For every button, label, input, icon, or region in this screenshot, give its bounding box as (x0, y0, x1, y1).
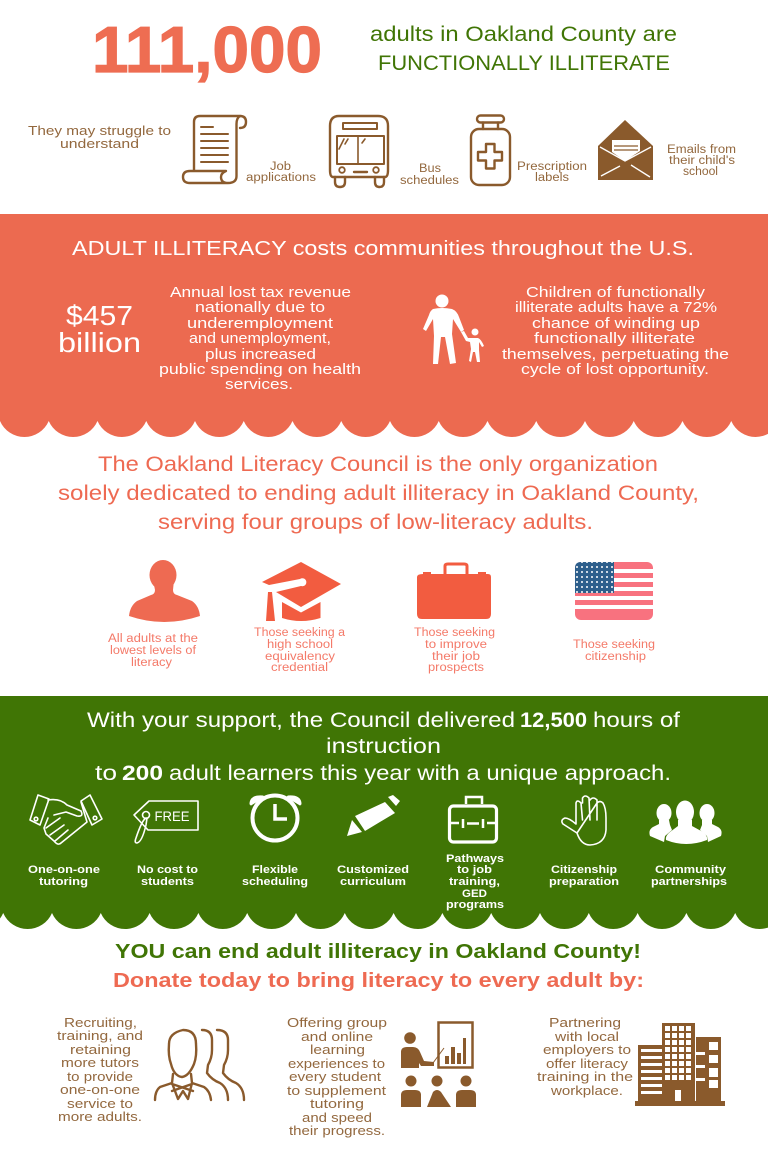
label: pathways: GED (462, 888, 487, 900)
label: bus schedules: schedules (400, 175, 459, 187)
label: flexible scheduling: Flexible (252, 864, 298, 876)
label: high school equivalency: Those seeking a (254, 627, 346, 639)
band statement (87, 709, 680, 785)
text: children of illiterate adults: chance of winding up (532, 315, 700, 332)
label: customized curriculum: Customized (337, 864, 409, 876)
band statement: With your support, the Council delivered (87, 709, 515, 732)
icon: bus (330, 116, 388, 187)
text: group and online learning: tutoring (310, 1096, 364, 1111)
text: children of illiterate adults (502, 284, 729, 378)
icon: prescription bottle (471, 116, 510, 185)
label: pathways: training, (449, 876, 500, 888)
text: group and online learning: their progress. (289, 1123, 385, 1138)
labels: approach features (28, 853, 727, 911)
label: emails: school (683, 166, 718, 178)
text: partnering with employers: employers to (543, 1042, 631, 1057)
text: children of illiterate adults: functionally illiterate (534, 330, 695, 347)
label: job prospects: Those seeking (414, 627, 495, 639)
heading: Oakland Literacy Council: serving four groups of low-literacy adults. (158, 511, 593, 534)
icon: red briefcase (417, 564, 491, 619)
text: group and online learning (287, 1015, 387, 1138)
scalloped green band (0, 696, 768, 929)
label: no cost: students (141, 876, 194, 888)
label: prescription labels: labels (535, 172, 569, 184)
text: partnering with employers (537, 1015, 633, 1098)
icon: adult and child (423, 294, 484, 364)
label: job prospects: to improve (425, 639, 487, 651)
label: community partnerships: Community (655, 864, 727, 876)
text: children of illiterate adults: illiterate adults have a 72% (515, 299, 717, 316)
label: emails (667, 144, 736, 178)
label: citizenship: citizenship (585, 651, 646, 663)
text: lost tax revenue: underemployment (187, 315, 334, 332)
text: lost tax revenue (159, 284, 361, 393)
intro text: they may struggle: They may struggle to (28, 123, 171, 138)
text: lost tax revenue: Annual lost tax revenue (170, 284, 351, 301)
text: group and online learning: and online (301, 1029, 373, 1044)
label: one-on-one tutoring (28, 864, 100, 888)
band statement: instruction (326, 735, 441, 758)
label: no cost: No cost to (137, 864, 198, 876)
text: partnering with employers: training in the (537, 1069, 633, 1084)
label: one-on-one tutoring: tutoring (39, 876, 88, 888)
text: recruiting tutors (57, 1015, 143, 1124)
label: customized curriculum (337, 864, 409, 888)
label: pathways (446, 853, 504, 911)
band statement: to (95, 762, 117, 785)
icon: free tag (134, 801, 198, 843)
label: all adults: All adults at the (108, 633, 198, 645)
text: partnering with employers: offer literacy (546, 1056, 629, 1071)
icon: graduation cap (262, 562, 341, 621)
statistic: $457 billion (58, 300, 141, 358)
text: lost tax revenue: services. (225, 376, 293, 393)
label: all adults (108, 633, 198, 669)
label: citizenship preparation: Citizenship (551, 864, 617, 876)
icon: alarm clock (250, 796, 301, 840)
band statement: hours of (593, 709, 680, 732)
scalloped red band (0, 214, 768, 437)
label: community partnerships (651, 864, 727, 888)
label: no cost (137, 864, 198, 888)
text: partnering with employers: workplace. (550, 1083, 623, 1098)
text: group and online learning: experiences to (288, 1056, 385, 1071)
label: high school equivalency: credential (271, 662, 328, 674)
text: recruiting tutors: service to (67, 1096, 133, 1111)
label: bus schedules: Bus (419, 163, 441, 175)
heading: Oakland Literacy Council: solely dedicated to ending adult illiteracy in Oakland County, (58, 482, 699, 505)
label: bus schedules (400, 163, 459, 187)
icon: tutors outline (155, 1030, 244, 1100)
label: job applications (246, 161, 316, 184)
label: job applications: Job (270, 161, 291, 173)
label: customized curriculum: curriculum (340, 876, 406, 888)
text: recruiting tutors: to provide (67, 1069, 133, 1084)
band statement: 200 (122, 762, 163, 785)
icon: open envelope (598, 120, 653, 180)
label: all adults: lowest levels of (110, 645, 197, 657)
intro text: they may struggle (28, 123, 171, 151)
icon: handshake (30, 795, 102, 844)
call to action heading: YOU can end adult illiteracy in Oakland County! (115, 941, 641, 963)
call to action heading: Donate today to bring literacy to every adult by: (113, 970, 644, 992)
label: one-on-one tutoring: One-on-one (28, 864, 100, 876)
icon: adult silhouette (129, 560, 200, 622)
icon: hand (562, 796, 606, 845)
icon: American flag (575, 562, 653, 620)
statistic: $457 billion: $457 (66, 300, 133, 331)
text: partnering with employers: with local (554, 1029, 619, 1044)
text: lost tax revenue: public spending on health (159, 361, 361, 378)
text: recruiting tutors: one-on-one (60, 1082, 140, 1097)
text: lost tax revenue: nationally due to (195, 299, 325, 316)
icon: free tag: FREE (154, 808, 190, 824)
intro text: they may struggle: understand (60, 136, 139, 151)
icon: pencil (347, 795, 400, 836)
label: pathways: Pathways (446, 853, 504, 865)
label: high school equivalency (254, 627, 346, 674)
label: community partnerships: partnerships (651, 876, 727, 888)
text: group and online learning: and speed (302, 1110, 372, 1125)
label: flexible scheduling: scheduling (242, 876, 308, 888)
text: group and online learning: every student (289, 1069, 381, 1084)
statistic: $457 billion: billion (58, 327, 141, 358)
text: group and online learning: Offering group (287, 1015, 387, 1030)
call to action heading (113, 941, 644, 992)
label: emails: Emails from (667, 144, 736, 156)
label: prescription labels (517, 161, 587, 184)
text: group and online learning: learning (310, 1042, 365, 1057)
text: lost tax revenue: plus increased (205, 346, 316, 363)
icon: community group (649, 800, 722, 844)
heading: Oakland Literacy Council: The Oakland Literacy Council is the only organization (98, 453, 658, 476)
text: recruiting tutors: retaining (70, 1042, 131, 1057)
heading: Oakland Literacy Council (58, 453, 699, 534)
text: partnering with employers: Partnering (549, 1015, 621, 1030)
label: high school equivalency: equivalency (265, 651, 335, 663)
headline statistic: 111,000: 111,000 (92, 13, 322, 86)
label: citizenship: Those seeking (573, 639, 655, 651)
label: job prospects: their job (432, 651, 480, 663)
label: flexible scheduling (242, 864, 308, 888)
icon: presenter and audience (401, 1022, 476, 1107)
text: recruiting tutors: training, and (57, 1028, 143, 1043)
text: group and online learning: to supplement (287, 1083, 386, 1098)
label: citizenship preparation (549, 864, 619, 888)
label: prescription labels: Prescription (517, 161, 587, 173)
label: pathways: to job (457, 864, 492, 876)
label: all adults: literacy (131, 657, 172, 669)
headline description: adults in Oakland County are (370, 23, 677, 46)
label: job prospects: prospects (428, 662, 484, 674)
text: children of illiterate adults: Children of functionally (526, 284, 706, 301)
text: children of illiterate adults: cycle of lost opportunity. (521, 361, 709, 378)
panel: approach (0, 696, 768, 929)
text: recruiting tutors: Recruiting, (64, 1015, 137, 1030)
headline description (370, 23, 677, 75)
band statement: 12,500 (520, 709, 587, 732)
band statement: adult learners this year with a unique approach. (169, 762, 671, 785)
label: emails: their child's (669, 155, 735, 167)
label: citizenship preparation: preparation (549, 876, 619, 888)
headline description: FUNCTIONALLY ILLITERATE (378, 52, 670, 75)
icon: white briefcase (450, 797, 496, 842)
text: recruiting tutors: more tutors (61, 1055, 140, 1070)
label: pathways: programs (446, 899, 504, 911)
icon: office buildings (635, 1023, 725, 1106)
label: citizenship (573, 639, 655, 663)
text: children of illiterate adults: themselves, perpetuating the (502, 346, 729, 363)
band heading: ADULT ILLITERACY costs communities throughout the U.S. (72, 238, 694, 260)
text: recruiting tutors: more adults. (58, 1109, 142, 1124)
label: job applications: applications (246, 172, 316, 184)
panel: cost of illiteracy (0, 214, 768, 437)
label: job prospects (414, 627, 495, 674)
label: high school equivalency: high school (267, 639, 333, 651)
text: lost tax revenue: and unemployment, (189, 330, 331, 347)
icon: scroll job application (183, 116, 246, 183)
